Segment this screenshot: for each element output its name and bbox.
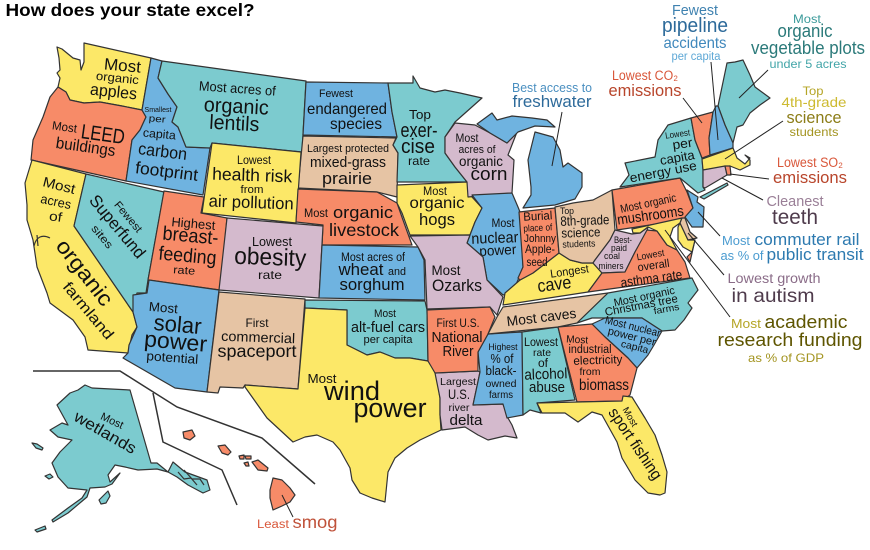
callout: top 4th-grade science students: 4th-grade [782, 94, 847, 110]
state: North Carolina, most organic Christmas tree farms: Christmas tree [604, 293, 679, 319]
state: Louisiana, largest U.S. river delta: U.S. [448, 387, 470, 402]
state: Michigan, best access to freshwater [477, 113, 582, 208]
state: New Mexico, first commercial spaceport: spaceport [218, 341, 297, 361]
state: Oklahoma, most alt-fuel cars per capita [305, 300, 428, 361]
state: Minnesota, top exercise rate [388, 76, 482, 182]
state: New Mexico, first commercial spaceport: commercial [221, 328, 295, 346]
callout: best access to freshwater: Best access to [512, 80, 592, 95]
callout: lowest growth in autism [688, 233, 820, 307]
state: North Dakota, fewest endangered species: Fewest [319, 88, 353, 100]
state: New York, lowest per capita energy use: energy use [628, 158, 698, 185]
callout: most commuter rail as percent of public transit: public transit [766, 245, 864, 264]
state: Maryland, most academic research funding [632, 218, 695, 252]
state: Illinois, most nuclear power: nuclear [471, 229, 519, 248]
state: California, most acres of organic farmland: of [48, 208, 64, 225]
state: South Dakota, largest protected mixed-grass prairie: Largest protected [307, 143, 389, 155]
state: Georgia, most industrial electricity from biomass: industrial [568, 344, 612, 356]
state: Mississippi, highest percent of black-owned farms: black- [486, 364, 516, 378]
state: Idaho, smallest per capita carbon footprint [126, 58, 210, 195]
state: California, most acres of organic farmland: acres [39, 191, 73, 212]
state: Oklahoma, most alt-fuel cars per capita: Most [374, 308, 396, 320]
state: Colorado, lowest obesity rate [219, 218, 323, 298]
state: North Dakota, fewest endangered species [303, 82, 397, 137]
callout: cleanest teeth: Cleanest [766, 193, 824, 210]
state: Pennsylvania, most organic mushrooms [612, 178, 693, 230]
state: Maine, most organic vegetable plots [718, 60, 770, 143]
callout: most commuter rail as percent of public transit [698, 212, 864, 264]
state: Florida, most sport fishing [537, 396, 667, 495]
state: Indiana, burial place of Johnny Appleseed: Johnny [524, 233, 556, 245]
state: Nebraska, most organic livestock: livestock [329, 220, 399, 240]
state: Utah, highest breast-feeding rate: Highest [171, 214, 216, 233]
callout: lowest SO2 emissions: emissions [773, 168, 847, 187]
state: Utah, highest breast-feeding rate: feeding [158, 243, 217, 270]
callout: lowest SO2 emissions: Lowest SO₂ [777, 155, 843, 170]
callout: most academic research funding as percent of GDP: academic [764, 311, 848, 332]
state: Montana, most acres of organic lentils: organic [203, 93, 269, 120]
state: Mississippi, highest percent of black-owned farms: farms [489, 390, 513, 401]
callout: fewest pipeline accidents per capita: pipeline [662, 14, 728, 37]
state: Wisconsin, most acres of organic corn: acres of [458, 144, 496, 156]
callout: least smog [257, 495, 338, 532]
state: Tennessee, most caves [488, 293, 608, 334]
state: Texas, most wind power: wind [323, 376, 380, 406]
state: Iowa, most organic hogs: organic [410, 195, 464, 212]
state: Arizona, most solar power potential: solar [153, 310, 203, 339]
state: Texas, most wind power [245, 308, 441, 502]
state: Missouri, most Ozarks: Most [432, 262, 461, 278]
callout: fewest pipeline accidents per capita: per capita [672, 51, 721, 63]
state: West Virginia, best-paid coal miners: miners [598, 261, 624, 272]
state: New York, lowest per capita energy use: Lowest [665, 127, 691, 141]
state: Kansas, most acres of wheat and sorghum: and [388, 266, 406, 278]
state: Missouri, most Ozarks: Ozarks [432, 276, 482, 295]
state: Wisconsin, most acres of organic corn: organic [459, 153, 503, 169]
state: Nebraska, most organic livestock: Most [304, 206, 329, 220]
callout: most commuter rail as percent of public transit: commuter rail [754, 230, 860, 249]
state: New Jersey, most commuter rail [685, 190, 704, 227]
callout: best access to freshwater [512, 80, 592, 166]
state: Oregon, most LEED buildings: Most [51, 118, 79, 136]
callout: most organic vegetable plots under 5 acres: Most [793, 12, 822, 26]
state: Alabama, lowest rate of alcohol abuse: of [538, 358, 549, 370]
state: Nevada, fewest Superfund sites: Fewest [111, 199, 144, 235]
state: West Virginia, best-paid coal miners: paid [611, 243, 627, 254]
state: Idaho, smallest per capita carbon footprint: carbon [137, 139, 188, 164]
state: Wisconsin, most acres of organic corn [445, 123, 517, 197]
state: Nevada, fewest Superfund sites [74, 174, 164, 312]
callout: lowest SO2 emissions [730, 155, 847, 187]
state: North Carolina, most organic Christmas tree farms: farms [653, 302, 681, 317]
state: South Dakota, largest protected mixed-grass prairie: mixed-grass [310, 155, 386, 171]
state: Minnesota, top exercise rate: cise [401, 135, 435, 158]
state: New York, lowest per capita energy use [620, 118, 728, 199]
callout: least smog: Least [257, 519, 290, 531]
state: Colorado, lowest obesity rate: Lowest [252, 234, 292, 249]
state: Louisiana, largest U.S. river delta: delta [450, 413, 483, 429]
state: Indiana, burial place of Johnny Appleseed: seed [526, 257, 548, 269]
state: Illinois, most nuclear power: power [479, 241, 517, 259]
callout: most organic vegetable plots under 5 acres: organic [778, 20, 832, 41]
state: Washington, most organic apples [57, 43, 151, 110]
state: Florida, most sport fishing: Most [620, 405, 640, 429]
state: Arkansas, first U.S. National River: River [442, 343, 474, 360]
state: California, most acres of organic farmland: organic [51, 235, 118, 311]
state: Montana, most acres of organic lentils: lentils [209, 111, 260, 136]
state: Illinois, most nuclear power [467, 193, 523, 295]
callout: most academic research funding as percent of GDP [665, 230, 862, 365]
callout: most academic research funding as percent of GDP: as % of GDP [748, 351, 824, 365]
state: Tennessee, most caves: Most caves [506, 305, 577, 329]
state: Wyoming, lowest health risk from air pollution: Lowest [237, 153, 272, 167]
state: Illinois, most nuclear power: Most [492, 218, 515, 230]
state: California, most acres of organic farmland: farmland [59, 279, 117, 343]
state: Kansas, most acres of wheat and sorghum: sorghum [340, 275, 404, 294]
state: Mississippi, highest percent of black-owned farms [473, 332, 523, 418]
callout: fewest pipeline accidents per capita: accidents [664, 35, 726, 52]
state: Indiana, burial place of Johnny Appleseed: Burial [523, 208, 553, 224]
state: Wyoming, lowest health risk from air pollution: air pollution [208, 192, 294, 213]
callout: fewest pipeline accidents per capita: Fewest [672, 2, 719, 19]
state: Florida, most sport fishing: sport fishing [604, 405, 665, 483]
state: South Carolina, most nuclear power per capita: power per [607, 325, 657, 349]
callout: lowest CO2 emissions [608, 68, 702, 123]
state: Arkansas, first U.S. National River: National [432, 329, 482, 346]
state: Colorado, lowest obesity rate: rate [258, 268, 282, 282]
state: West Virginia, best-paid coal miners [593, 227, 648, 273]
state: Colorado, lowest obesity rate: obesity [234, 243, 307, 272]
state: Nebraska, most organic livestock [296, 189, 412, 245]
state: Texas, most wind power: Most [308, 371, 337, 386]
state: Indiana, burial place of Johnny Appleseed: Apple- [525, 242, 555, 256]
callout: top 4th-grade science students: students [790, 125, 838, 139]
state: Georgia, most industrial electricity from biomass: biomass [579, 377, 629, 394]
state: Ohio, top 8th-grade science students: students [562, 238, 596, 251]
state: Alabama, lowest rate of alcohol abuse [522, 327, 575, 415]
state: Iowa, most organic hogs: hogs [419, 210, 455, 229]
state: Idaho, smallest per capita carbon footprint: Smallest [144, 105, 172, 114]
state: Georgia, most industrial electricity from biomass: Most [566, 333, 589, 347]
state: Montana, most acres of organic lentils: Most acres of [198, 78, 276, 99]
state: Arkansas, first U.S. National River: First U.S. [436, 318, 480, 330]
state: Utah, highest breast-feeding rate [148, 191, 227, 290]
state: Alaska, most wetlands: wetlands [70, 408, 139, 458]
state: Indiana, burial place of Johnny Appleseed: place of [523, 222, 553, 235]
state: Pennsylvania, most organic mushrooms: Most organic [619, 192, 678, 216]
callout: most organic vegetable plots under 5 acres [739, 12, 865, 98]
callout: top 4th-grade science students: Top [802, 84, 824, 98]
state: Iowa, most organic hogs: Most [423, 186, 448, 198]
state: North Carolina, most organic Christmas tree farms [577, 278, 698, 331]
title: How does your state excel? [6, 0, 254, 20]
state: Arizona, most solar power potential: Most [148, 299, 179, 316]
callout: best access to freshwater: freshwater [512, 92, 592, 111]
state: Alabama, lowest rate of alcohol abuse: alcohol [524, 365, 568, 384]
state: Indiana, burial place of Johnny Appleseed [518, 208, 559, 280]
state: Arizona, most solar power potential: potential [146, 348, 199, 367]
state: Rhode Island, lowest SO2 emissions [725, 166, 731, 175]
state: Nevada, fewest Superfund sites: sites [88, 223, 115, 252]
state: Oklahoma, most alt-fuel cars per capita: per capita [364, 334, 413, 346]
callout: most academic research funding as percent of GDP: research funding [718, 329, 862, 350]
state: Delaware, lowest growth in autism [680, 218, 697, 240]
state: West Virginia, best-paid coal miners: Best- [614, 235, 632, 246]
callout: fewest pipeline accidents per capita [662, 2, 728, 140]
state: Kansas, most acres of wheat and sorghum: Most acres of [341, 252, 406, 264]
state: North Dakota, fewest endangered species: species [330, 116, 382, 133]
callout: lowest CO2 emissions: Lowest CO₂ [612, 68, 678, 83]
callout: least smog: smog [292, 512, 338, 532]
state: South Carolina, most nuclear power per capita: capita [620, 339, 650, 356]
state: Idaho, smallest per capita carbon footprint: footprint [134, 158, 199, 185]
state: Wyoming, lowest health risk from air pollution: health risk [212, 164, 293, 186]
state: Massachusetts, top 4th-grade science students [702, 148, 750, 170]
state: Idaho, smallest per capita carbon footprint: per [148, 113, 166, 126]
callout: lowest growth in autism: Lowest growth [728, 271, 820, 286]
state: Mississippi, highest percent of black-owned farms: % of [490, 351, 514, 366]
state: Wisconsin, most acres of organic corn: corn [470, 163, 508, 184]
state: Mississippi, highest percent of black-owned farms: Highest [488, 342, 518, 353]
state: Washington, most organic apples: apples [89, 81, 138, 103]
state: Kansas, most acres of wheat and sorghum: wheat [338, 260, 384, 279]
callout: cleanest teeth: teeth [772, 205, 818, 229]
callout: lowest CO2 emissions: emissions [608, 81, 682, 100]
state: Connecticut, cleanest teeth [703, 166, 727, 188]
state: New Hampshire, fewest pipeline accidents [709, 106, 733, 155]
callout: top 4th-grade science students [725, 84, 847, 159]
state: Pennsylvania, most organic mushrooms: mushrooms [616, 203, 685, 229]
state: Vermont, lowest CO2 emissions [691, 112, 713, 158]
state: Alaska, most wetlands: Most [98, 411, 125, 432]
state: Alabama, lowest rate of alcohol abuse: abuse [529, 379, 565, 396]
state: North Dakota, fewest endangered species: endangered [307, 101, 387, 118]
callout: most commuter rail as percent of public transit: Most [722, 233, 750, 248]
state: Virginia, lowest overall asthma rate: overall [637, 258, 670, 274]
state: Kentucky, longest cave: cave [536, 272, 572, 296]
state: Oregon, most LEED buildings [31, 87, 146, 181]
state: Alaska, most wetlands [32, 385, 210, 532]
state: Georgia, most industrial electricity from biomass: electricity [573, 352, 623, 368]
state: New Mexico, first commercial spaceport: First [246, 316, 269, 330]
state: Montana, most acres of organic lentils [158, 61, 306, 152]
state: Wyoming, lowest health risk from air pollution [202, 143, 301, 223]
state: South Dakota, largest protected mixed-grass prairie [298, 136, 398, 197]
state: Wisconsin, most acres of organic corn: Most [456, 131, 479, 145]
callout: most academic research funding as percent of GDP: Most [731, 316, 761, 331]
state: Louisiana, largest U.S. river delta: Largest [440, 376, 476, 388]
state: Utah, highest breast-feeding rate: rate [173, 264, 196, 278]
state: Texas, most wind power: power [354, 393, 426, 423]
state: Minnesota, top exercise rate: exer- [400, 119, 438, 142]
state: Arkansas, first U.S. National River [427, 307, 495, 373]
state: Virginia, lowest overall asthma rate [588, 230, 695, 292]
state: Arizona, most solar power potential [123, 280, 219, 392]
state: North Carolina, most organic Christmas tree farms: Most organic [613, 285, 676, 309]
state: Hawaii, least smog [183, 430, 295, 510]
state: Minnesota, top exercise rate: Top [409, 107, 431, 122]
state: Idaho, smallest per capita carbon footprint: capita [142, 126, 177, 142]
state: Oregon, most LEED buildings: LEED [80, 120, 126, 149]
state: Virginia, lowest overall asthma rate: asthma rate [620, 267, 683, 290]
callout: cleanest teeth [722, 178, 824, 229]
state: Nevada, fewest Superfund sites: Superfund [85, 191, 149, 262]
state: New York, lowest per capita energy use: capita [659, 147, 697, 168]
state: Ohio, top 8th-grade science students: Top [560, 206, 574, 217]
state: Minnesota, top exercise rate: rate [408, 154, 430, 168]
state: Ohio, top 8th-grade science students: 8th-grade [560, 212, 610, 229]
state: West Virginia, best-paid coal miners: coal [604, 251, 620, 262]
state: California, most acres of organic farmland [25, 160, 137, 353]
state: Alabama, lowest rate of alcohol abuse: rate [533, 347, 551, 359]
state: New Mexico, first commercial spaceport [207, 292, 305, 393]
inset divider lines for Alaska and Hawaii [33, 371, 315, 505]
state: Alabama, lowest rate of alcohol abuse: Lowest [524, 337, 559, 349]
state: Missouri, most Ozarks [410, 235, 503, 315]
callout: top 4th-grade science students: science [786, 108, 842, 127]
state: Washington, most organic apples: Most [103, 55, 142, 77]
state: Nebraska, most organic livestock: organic [333, 203, 394, 222]
state: Arizona, most solar power potential: power [143, 326, 209, 357]
state: Mississippi, highest percent of black-owned farms: owned [486, 378, 517, 390]
state: Wyoming, lowest health risk from air pollution: from [240, 184, 264, 196]
state: Iowa, most organic hogs [397, 182, 482, 235]
callout: lowest growth in autism: in autism [732, 285, 814, 307]
state: Ohio, top 8th-grade science students: science [561, 224, 601, 241]
state: Georgia, most industrial electricity from biomass: from [580, 367, 600, 378]
state: Kansas, most acres of wheat and sorghum [319, 245, 425, 300]
state: South Dakota, largest protected mixed-grass prairie: prairie [322, 169, 372, 188]
state: Kentucky, longest cave [503, 253, 602, 305]
state: Washington, most organic apples: organic [95, 69, 140, 87]
state: Oregon, most LEED buildings: buildings [55, 135, 117, 160]
state: Virginia, lowest overall asthma rate: Lowest [636, 248, 666, 263]
state: South Carolina, most nuclear power per capita [592, 314, 662, 368]
state: South Carolina, most nuclear power per capita: Most nuclear [604, 314, 662, 340]
state: Georgia, most industrial electricity from biomass [558, 324, 637, 402]
state: Louisiana, largest U.S. river delta [435, 371, 517, 440]
state: New York, lowest per capita energy use: per [671, 135, 694, 152]
state: Kentucky, longest cave: Longest [549, 263, 590, 281]
callout: most organic vegetable plots under 5 acres: under 5 acres [770, 57, 846, 71]
state: California, most acres of organic farmland: Most [41, 173, 77, 197]
state: Louisiana, largest U.S. river delta: river [448, 402, 470, 414]
callout: most commuter rail as percent of public transit: as % of [720, 249, 764, 263]
state: Ohio, top 8th-grade science students [555, 190, 615, 263]
state: Oklahoma, most alt-fuel cars per capita: alt-fuel cars [351, 319, 425, 336]
state: Utah, highest breast-feeding rate: breast- [162, 223, 219, 249]
